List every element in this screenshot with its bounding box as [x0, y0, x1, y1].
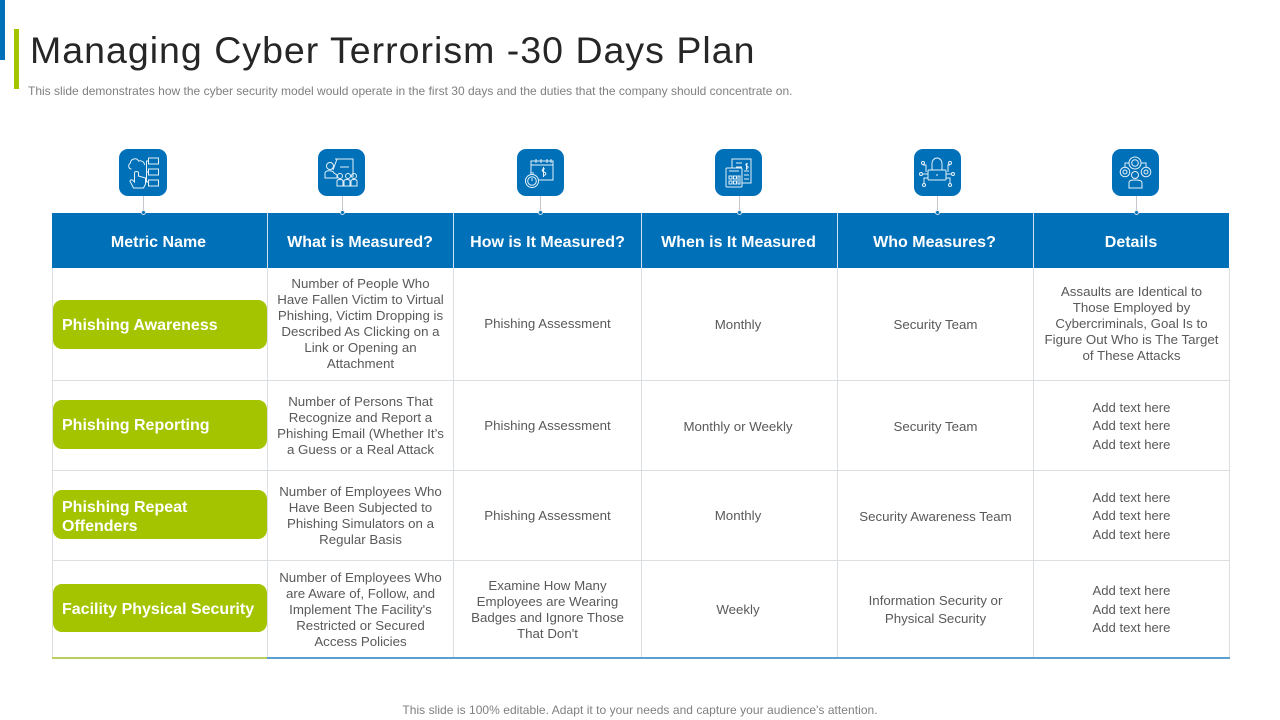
row 4: how: That Don't — [517, 626, 578, 640]
row 4: what is measured: Implement The Facility's — [289, 602, 432, 616]
row 4: facility physical security: Facility Physical Security — [62, 600, 254, 618]
row 4: who: Physical Security — [885, 610, 986, 626]
row 3: details: Add text here — [1093, 490, 1170, 505]
icon: presenter and audience — [318, 149, 365, 196]
row 1: what is measured: Number of People Who — [291, 276, 430, 291]
row 2: what is measured: Recognize and Report a — [289, 410, 432, 425]
row 4: what is measured: Restricted or Secured — [296, 618, 425, 632]
row 3: phishing repeat offenders: Phishing Repeat — [62, 498, 187, 516]
row 1: details — [1045, 284, 1218, 363]
row 4: what is measured — [279, 570, 442, 648]
header: how is it measured: How is It Measured? — [470, 234, 625, 251]
header: metric name: Metric Name — [111, 234, 206, 251]
row 1: when: Monthly — [715, 317, 761, 332]
row 4: what is measured: Access Policies — [314, 634, 407, 648]
row 2: details: Add text here — [1093, 400, 1170, 415]
icon: gears and person — [1112, 149, 1159, 196]
row 3: details: Add text here — [1093, 527, 1170, 542]
row 3: what is measured — [279, 484, 442, 547]
icon: calendar and stopwatch — [517, 149, 564, 196]
row 1: details: of These Attacks — [1082, 348, 1181, 363]
row 2: when: Monthly or Weekly — [683, 419, 793, 434]
row 4: how: Examine How Many — [488, 578, 607, 592]
row 1: who: Security Team — [893, 317, 978, 332]
row 1: phishing awareness — [53, 300, 267, 349]
row 3: details — [1092, 490, 1170, 542]
row 4: facility physical security — [53, 584, 267, 632]
row 4: what is measured: Number of Employees Who — [279, 570, 442, 584]
table header — [52, 213, 1229, 268]
row 4: how — [471, 578, 624, 640]
subtitle: This slide demonstrates how the cyber security model would operate in the first 30 days and the duties that the company should concentrate on. — [28, 84, 792, 98]
row 3: who: Security Awareness Team — [859, 509, 1012, 524]
accent bar: blue — [0, 0, 5, 60]
row 3: phishing repeat offenders — [53, 490, 267, 539]
accent bar: green — [14, 29, 19, 89]
row 2: who: Security Team — [893, 419, 978, 434]
row 1: details: Assaults are Identical to — [1061, 284, 1202, 299]
row 2: details — [1092, 400, 1170, 452]
row 4: details: Add text here — [1093, 602, 1170, 617]
header: when is it measured: When is It Measured — [661, 234, 816, 251]
row 3: what is measured: Have Been Subjected to — [289, 500, 432, 515]
row 4: details: Add text here — [1093, 583, 1170, 598]
row 3: what is measured: Number of Employees Who — [279, 484, 442, 499]
row 4: details: Add text here — [1093, 620, 1170, 635]
row 3: details: Add text here — [1093, 508, 1170, 523]
row 1: how is it measured: Phishing Assessment — [484, 316, 611, 331]
row 2: what is measured: Phishing Email (Whether It’s — [277, 426, 444, 441]
row 1: what is measured: Have Fallen Victim to Virtual — [277, 292, 444, 307]
row 3: how: Phishing Assessment — [484, 508, 611, 523]
row 1: phishing awareness: Phishing Awareness — [62, 317, 218, 334]
row 4: how: Badges and Ignore Those — [471, 610, 624, 624]
header: what is measured: What is Measured? — [287, 234, 433, 251]
row 2: what is measured: Number of Persons That — [288, 394, 433, 409]
row 4: how: Employees are Wearing — [477, 594, 618, 608]
row 1: details: Cybercriminals, Goal Is to — [1055, 316, 1208, 331]
row 1: what is measured: Attachment — [327, 356, 394, 371]
header: who measures: Who Measures? — [873, 234, 996, 251]
row 1: details: Figure Out Who is The Target — [1045, 332, 1218, 347]
row 3: when: Monthly — [715, 508, 761, 523]
row 3: what is measured: Phishing Simulators on a — [287, 516, 434, 531]
row 4: details — [1092, 583, 1170, 635]
row 2: how: Phishing Assessment — [484, 418, 611, 433]
footer note: This slide is 100% editable. Adapt it to your needs and capture your audience's attention. — [402, 703, 878, 717]
row 1: what is measured: Phishing, Victim Dropping is — [278, 308, 443, 323]
row 4: who — [869, 592, 1002, 626]
row 3: what is measured: Regular Basis — [319, 532, 402, 547]
row 2: phishing reporting: Phishing Reporting — [62, 417, 210, 434]
row 4: who: Information Security or — [869, 592, 1002, 608]
row 1: details: Those Employed by — [1073, 300, 1190, 315]
icon: calculator and invoice — [715, 149, 762, 196]
title: Managing Cyber Terrorism -30 Days Plan — [30, 29, 755, 71]
row 2: phishing reporting — [53, 400, 267, 449]
row 1: what is measured: Link or Opening an — [304, 340, 417, 355]
row 2: what is measured — [277, 394, 444, 457]
icon: cloud and hand with monitors — [119, 149, 167, 196]
row 1: what is measured — [277, 276, 444, 371]
row 4: when: Weekly — [716, 602, 760, 616]
row 3: phishing repeat offenders: Offenders — [62, 518, 138, 534]
row 2: details: Add text here — [1093, 418, 1170, 433]
row 4: what is measured: are Aware of, Follow, and — [286, 586, 435, 600]
connector stems — [141, 196, 1139, 215]
header: details: Details — [1105, 234, 1157, 251]
row 2: what is measured: a Guess or a Real Attack — [287, 442, 434, 457]
row 2: details: Add text here — [1093, 437, 1170, 452]
icon: padlock circuit — [914, 149, 961, 196]
row 1: what is measured: Described As Clicking on a — [281, 324, 440, 339]
